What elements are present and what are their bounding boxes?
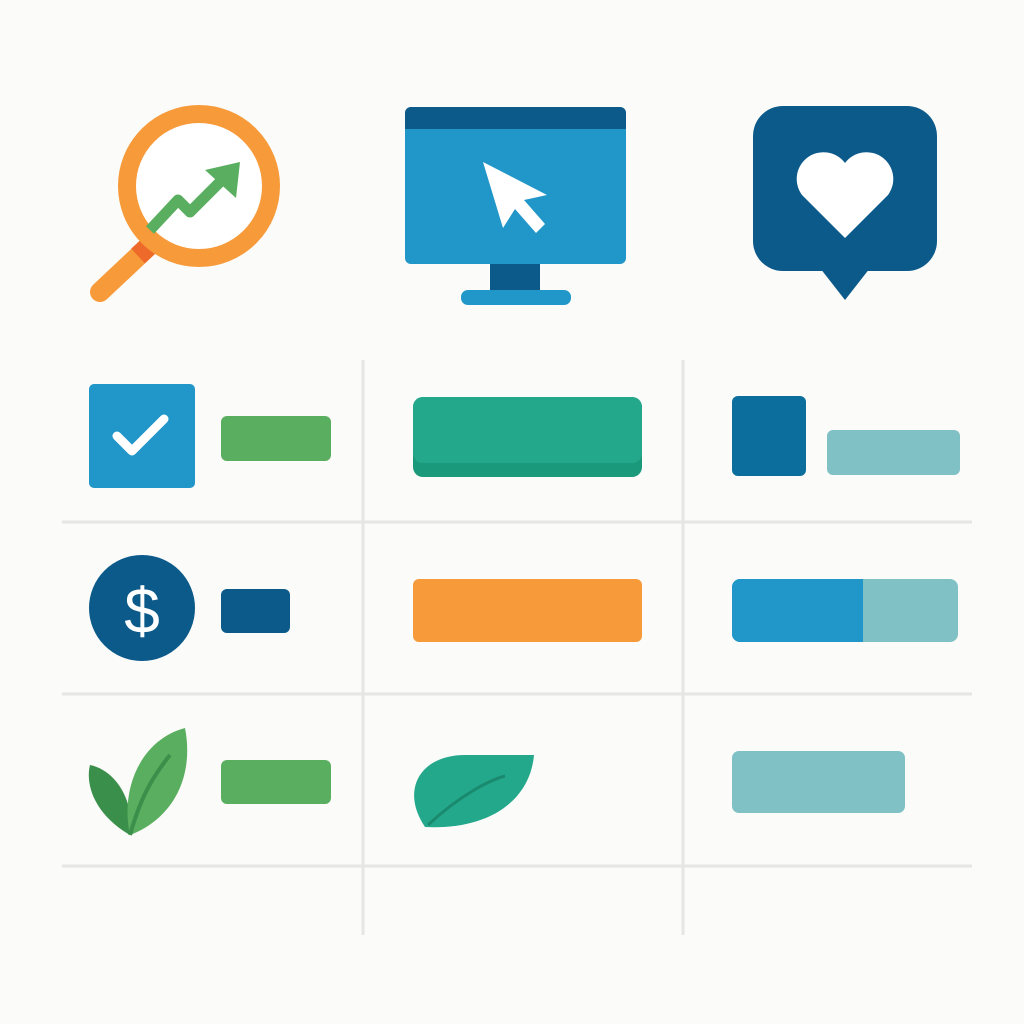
icon: magnifier with growth arrow bbox=[100, 114, 271, 292]
row 3 bbox=[89, 728, 905, 835]
row 2 bbox=[89, 555, 958, 661]
icon: speech bubble heart bbox=[753, 106, 937, 300]
row 1 bbox=[89, 384, 960, 488]
row 2: $ bbox=[124, 575, 160, 647]
icon: monitor with cursor bbox=[405, 107, 626, 305]
